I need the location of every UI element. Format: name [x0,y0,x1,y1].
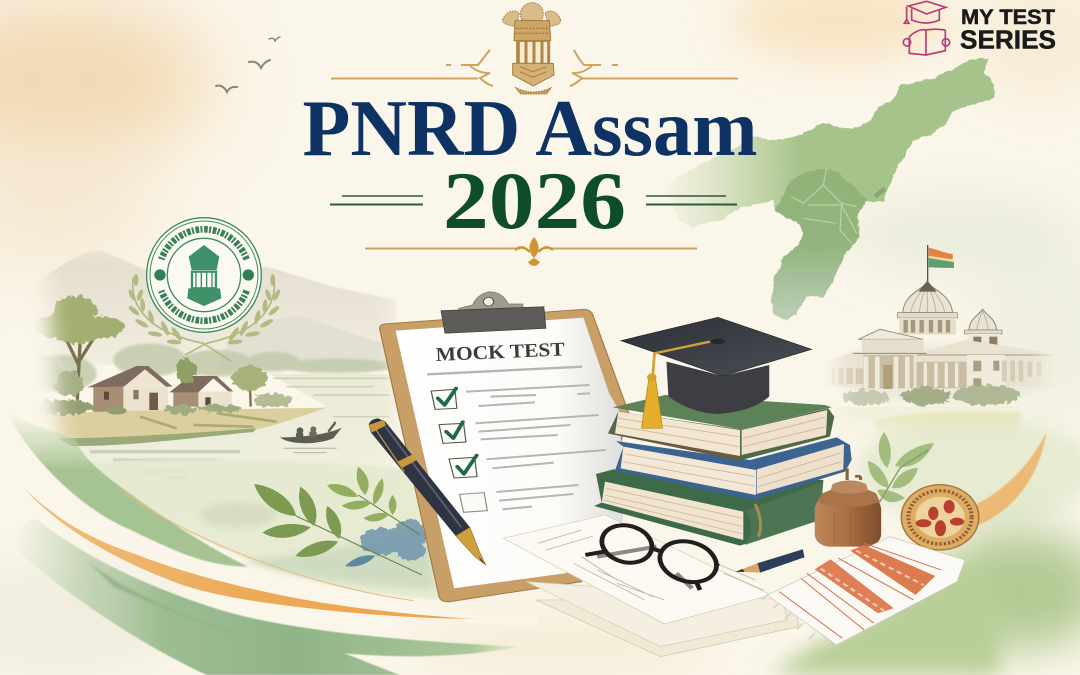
top green book [608,395,834,460]
boat [280,422,342,453]
lower green band [10,519,520,675]
main sheet [503,515,771,624]
checkboxes [431,389,487,512]
thin gold line [121,490,413,601]
upper green band [7,413,248,567]
separator and question lines [427,367,606,509]
ornament: top gold rule with flourishes [331,50,738,86]
assembly building [827,245,1053,440]
glasses [585,519,724,590]
logo wordmark: MY TEST [961,6,1055,29]
seal: green emblem with laurel wreath [127,218,281,362]
ornament: bottom gold rule with fleur-de-lis [365,237,697,266]
emblem [503,3,561,94]
clipboard with mock test [380,292,629,602]
ornament: green rules beside year [330,196,737,204]
left foliage [254,467,422,575]
pale green wash [86,458,448,600]
white band [0,473,537,627]
pen [369,418,486,565]
blue wash [360,520,427,560]
gold swoosh [26,490,482,619]
title: PNRD Assam: PNRD Assam [302,85,758,173]
river [78,374,396,466]
subtitle: 2026: 2026 [443,155,626,246]
tree line [23,343,393,392]
exam papers under the stack [503,515,799,657]
stack of books [594,395,852,546]
central districts [773,168,867,320]
bottom green book [594,469,823,546]
graduation cap [621,317,812,428]
river bank [32,400,327,446]
map of Assam [665,58,995,320]
bottom left green and gold swooshes [0,413,537,675]
small tree [232,366,293,407]
pencil [736,549,804,573]
houses [87,357,233,413]
left tree [27,296,124,400]
birds [216,37,280,92]
gamosa cloth [761,537,965,647]
shrubs [844,385,1020,406]
clip [441,292,546,333]
bottom right gold swoosh [975,433,1046,525]
wings [827,340,1053,387]
heading: mock test: MOCK TEST [435,339,565,366]
logo: My Test Series: SERIES [960,24,1056,54]
landscape: hills, river, village and boat [36,251,396,466]
lawn [838,406,1020,426]
medallion [901,485,979,550]
logo icon: cap and open book [903,1,950,55]
distant hills [17,251,397,370]
middle blue book [615,437,852,500]
wooden pot [815,468,881,547]
wreath [133,277,274,362]
logo: My Test Series [903,1,1056,55]
right foliage [868,432,934,510]
flag [928,245,954,283]
